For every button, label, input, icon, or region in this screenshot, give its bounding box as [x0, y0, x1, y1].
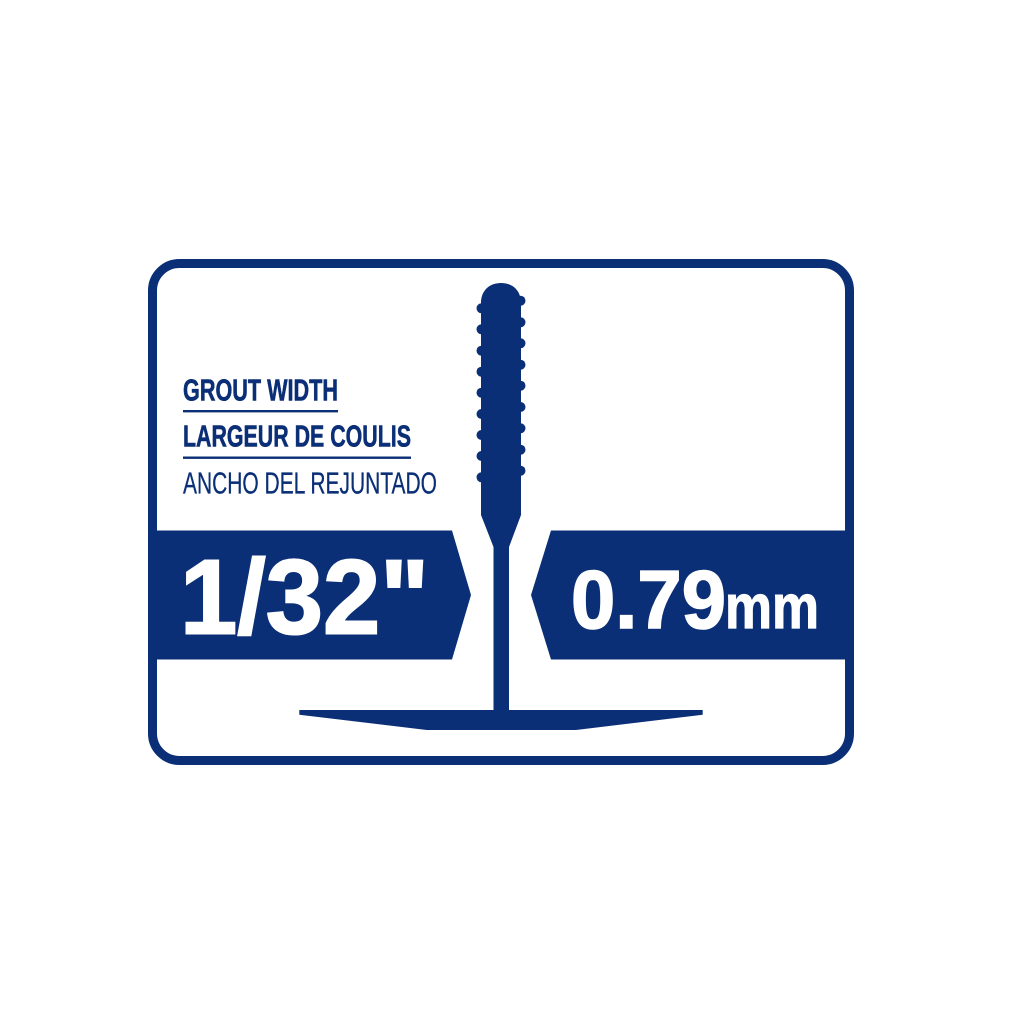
rounded frame: [152, 264, 850, 760]
panel: imperial value: [157, 530, 471, 660]
spacer icon: [299, 283, 703, 730]
panel: metric value: [531, 530, 846, 660]
label: English: GROUT WIDTH: [183, 372, 338, 408]
label: Spanish: ANCHO DEL REJUNTADO: [183, 466, 437, 500]
value: 0.79 mm: 0.79: [571, 553, 726, 646]
value: 1/32 inch: 1/32": [180, 538, 429, 656]
unit: mm: mm: [725, 573, 819, 642]
heading: grout width labels: [183, 372, 437, 500]
label: French: LARGEUR DE COULIS: [183, 418, 411, 454]
